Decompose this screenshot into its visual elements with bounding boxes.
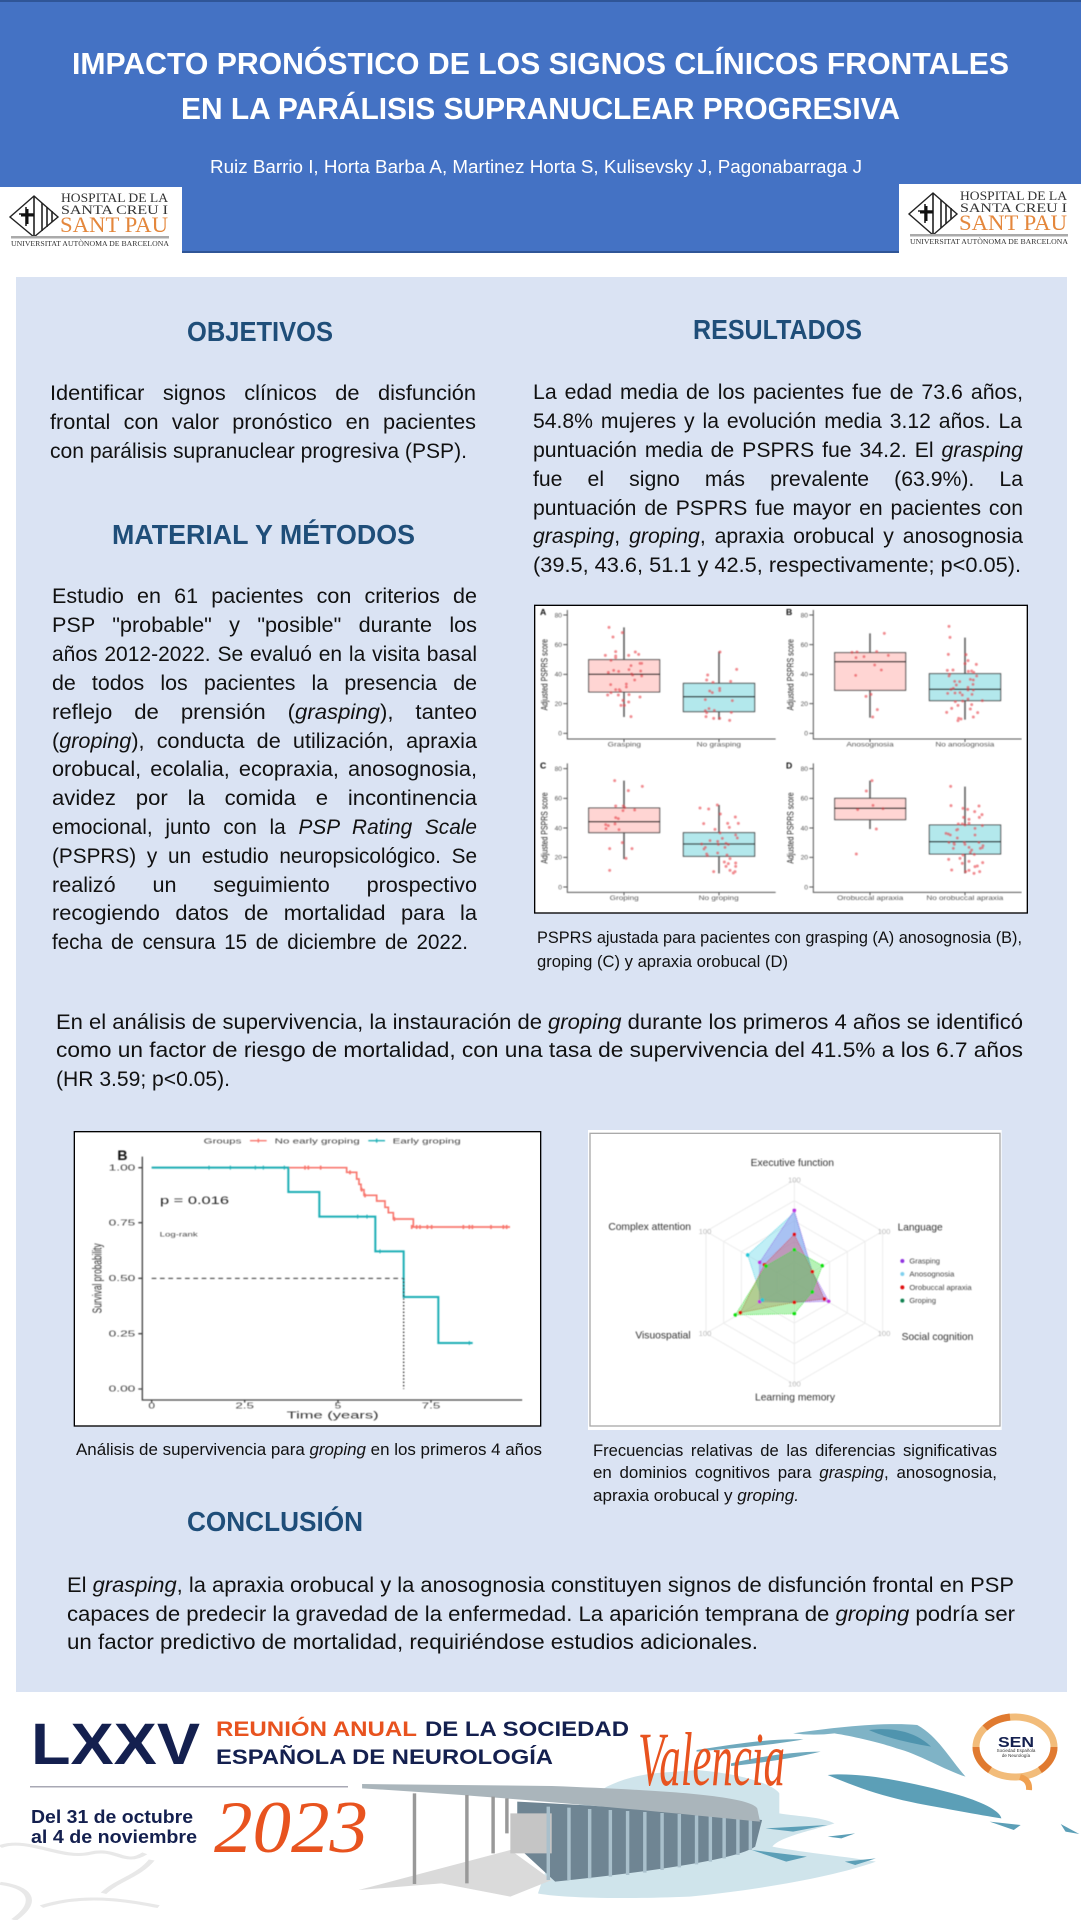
radar axis labels: Executive function [751,1158,834,1169]
heading: resultados: RESULTADOS [693,314,862,345]
text: material y métodos: fecha de censura 15 de diciembre de 2022. [52,931,468,954]
text: survival analysis: (HR 3.59; p<0.05). [56,1068,230,1091]
plot D: orobuccal apraxia: No orobuccal apraxia [926,895,1004,902]
chart axes: Survival probability [89,1243,104,1313]
text: resultados [533,381,1023,577]
title: IMPACTO PRONÓSTICO DE LOS SIGNOS CLÍNICOS FRONTALES [72,45,1009,81]
year: 2023 [214,1787,368,1869]
meeting name: DE LA SOCIEDAD [425,1718,629,1741]
chart legend: Groups [204,1136,242,1145]
plot A: grasping: 80 [555,612,562,619]
logo: Hospital de la Santa Creu i Sant Pau (right): SANTA CREU I [960,201,1067,215]
radar scale labels: 100 [788,1176,801,1185]
plot B: anosognosia [786,607,1022,749]
radar scale labels [699,1176,890,1389]
text: material y métodos: realizó un seguimiento prospectivo [52,874,477,897]
radar scale labels: 100 [878,1329,890,1338]
text: resultados: grasping, groping, apraxia orobucal y anosognosia [533,525,1023,548]
plot C: groping: C [540,761,547,771]
plot B: anosognosia: 80 [801,612,808,619]
text: conclusión [67,1574,1015,1654]
series: grasping [760,1210,829,1302]
radar chart [588,1130,1002,1430]
plot C: groping: 40 [555,825,562,832]
text: resultados: 54.8% mujeres y la evolución media 3.12 años. La [533,410,1022,433]
caption: radar chart: Frecuencias relativas de las diferencias significativas [593,1442,997,1460]
caption: radar chart [593,1442,997,1505]
plot D: orobuccal apraxia: D [786,761,792,771]
radar axis labels: Complex attention [608,1222,691,1233]
radar legend: Anosognosia [909,1269,955,1278]
radar scale labels: 100 [699,1329,711,1338]
text: material y métodos: Estudio en 61 pacientes con criterios de [52,585,477,608]
chart axes: Time (years) [287,1410,379,1421]
text: material y métodos: recogiendo datos de mortalidad para la [52,902,477,925]
authors: Ruiz Barrio I, Horta Barba A, Martinez Horta S, Kulisevsky J, Pagonabarraga J [210,156,862,177]
series: orobuccal apraxia [740,1234,824,1313]
logo: SEN: SEN [998,1734,1034,1751]
meeting name: REUNIÓN ANUAL [216,1717,417,1741]
logo: SEN: Sociedad Española [997,1748,1036,1753]
dates: Del 31 de octubre [31,1807,193,1827]
curve: no early groping [152,1166,510,1229]
chart axes: 0.75 [109,1217,136,1227]
chart axes: 7.5 [422,1401,441,1411]
logo: Hospital de la Santa Creu i Sant Pau (left): HOSPITAL DE LA [61,191,168,205]
text: objetivos: frontal con valor pronóstico en pacientes [50,411,476,434]
caption: box plots: PSPRS ajustada para pacientes con grasping (A) anosognosia (B), [537,929,1022,947]
text: material y métodos: (groping), conducta de utilización, apraxia [52,730,477,753]
logo: SEN: de Neurología [1002,1753,1031,1758]
plot B: anosognosia: 0 [804,731,808,738]
radar legend: Orobuccal apraxia [909,1283,973,1292]
radar axis labels: Language [898,1222,943,1233]
radar axis labels [608,1158,973,1404]
logo: Hospital de la Santa Creu i Sant Pau (right): HOSPITAL DE LA [960,189,1067,203]
logo: Hospital de la Santa Creu i Sant Pau (right): SANT PAU [959,210,1067,235]
radar scale labels: 100 [699,1227,711,1236]
survival chart [74,1132,541,1426]
plot D: orobuccal apraxia: Orobuccal apraxia [837,895,904,902]
meeting name: ESPAÑOLA DE NEUROLOGÍA [216,1746,553,1769]
meeting name [216,1717,629,1769]
chart axes: 1.00 [109,1162,136,1172]
decorative illustration: watercolor and building [0,1724,1079,1920]
radar axis labels: Social cognition [902,1332,973,1343]
plot A: grasping: No grasping [697,742,741,749]
text: objetivos [50,382,476,463]
curve: early groping [152,1168,473,1343]
plot C: groping: 80 [555,766,562,773]
chart legend [204,1136,461,1145]
radar scale labels: 100 [788,1380,801,1389]
text: survival analysis [56,1011,1023,1091]
chart axes [89,1147,522,1421]
plot A: grasping: 0 [558,731,562,738]
plot A: grasping: 40 [555,672,562,679]
caption: radar chart: en dominios cognitivos para grasping, anosognosia, [593,1464,997,1482]
text: resultados: (39.5, 43.6, 51.1 y 42.5, respectivamente; p<0.05). [533,554,1021,577]
heading: objetivos: OBJETIVOS [187,316,333,347]
caption: survival chart: Análisis de supervivencia para groping en los primeros 4 años [76,1441,542,1459]
text: conclusión: El grasping, la apraxia orobucal y la anosognosia constituyen signos de disfunción frontal en PSP [67,1574,1014,1597]
median survival marker [402,1278,406,1389]
text: material y métodos: de todos los pacientes la presencia de [52,672,477,695]
chart axes: 0.50 [109,1273,136,1283]
logo: Hospital de la Santa Creu i Sant Pau (right): UNIVERSITAT AUTÒNOMA DE BARCELONA [910,236,1069,246]
plot C: groping: Adjusted PSPRS score [540,792,550,864]
plot B: anosognosia: 60 [801,642,808,649]
logo: Hospital de la Santa Creu i Sant Pau (left): SANTA CREU I [61,203,168,217]
text: survival analysis: como un factor de riesgo de mortalidad, con una tasa de supervivencia del 41.5% a los 6.7 años [56,1039,1023,1062]
plot C: groping: 60 [555,796,562,803]
plot B: anosognosia: Adjusted PSPRS score [786,639,796,710]
text: material y métodos: emocional, junto con la PSP Rating Scale [52,816,477,839]
plot B: anosognosia: No anosognosia [935,742,995,749]
title [72,45,1009,126]
radar axis labels: Learning memory [755,1393,835,1404]
plot B: anosognosia: 40 [801,672,808,679]
series: groping [735,1250,822,1315]
heading: conclusión: CONCLUSIÓN [187,1506,363,1537]
text: conclusión: un factor predictivo de mortalidad, requiriéndose estudios adicionales. [67,1631,758,1654]
text: objetivos: con parálisis supranuclear progresiva (PSP). [50,440,467,463]
chart axes: 0 [148,1401,155,1411]
plot B: anosognosia: 20 [801,701,808,708]
chart axes: B [117,1147,127,1163]
text: material y métodos [52,585,477,954]
text: objetivos: Identificar signos clínicos de disfunción [50,382,476,405]
caption: box plots [537,929,1022,971]
text: material y métodos: (PSPRS) y un estudio neuropsicológico. Se [52,845,477,868]
chart axes: 0.00 [109,1384,136,1394]
chart legend: Early groping [393,1136,461,1145]
p value: p = 0.016 [160,1195,229,1207]
plot C: groping: 0 [558,884,562,891]
plot D: orobuccal apraxia: 20 [801,855,808,862]
p value: Log-rank [160,1232,198,1238]
plot D: orobuccal apraxia [786,761,1022,902]
chart axes: 2.5 [235,1401,254,1411]
plot D: orobuccal apraxia: Adjusted PSPRS score [786,792,796,864]
logo: SEN [976,1717,1054,1790]
plot D: orobuccal apraxia: 0 [804,884,808,891]
series: anosognosia [748,1213,824,1302]
plot C: groping [540,761,776,902]
series markers [760,1210,829,1302]
caption: box plots: groping (C) y apraxia orobucal (D) [537,953,788,971]
radar axis labels: Visuospatial [635,1331,691,1342]
heading: material y métodos: MATERIAL Y MÉTODOS [112,519,415,550]
dates [31,1807,197,1847]
radar scale labels: 100 [878,1227,890,1236]
plot C: groping: Groping [610,895,639,902]
plot A: grasping [540,607,776,749]
plot D: orobuccal apraxia: 60 [801,796,808,803]
radar legend: Grasping [909,1256,940,1265]
chart axes: 5 [335,1401,342,1411]
radar legend [900,1256,973,1305]
main panel [16,277,1067,1692]
text: material y métodos: reflejo de prensión ( grasping), tanteo [52,701,477,724]
text: conclusión: capaces de predecir la gravedad de la enfermedad. La aparición temprana de groping podría ser [67,1603,1015,1626]
plot D: orobuccal apraxia: 80 [801,766,808,773]
plot C: groping: No groping [699,895,739,902]
logo: Hospital de la Santa Creu i Sant Pau (left) [0,187,182,253]
logo: Hospital de la Santa Creu i Sant Pau (right) [899,184,1081,253]
plot A: grasping: 60 [555,642,562,649]
chart axes: 0.25 [109,1328,136,1338]
text: resultados: puntuación de PSPRS fue mayor en pacientes con [533,497,1023,520]
logo: Hospital de la Santa Creu i Sant Pau (left): UNIVERSITAT AUTÒNOMA DE BARCELONA [11,238,170,248]
p value [160,1195,229,1238]
caption: radar chart: apraxia orobucal y groping. [593,1487,799,1505]
box plots: adjusted PSPRS score [535,605,1027,913]
text: material y métodos: PSP "probable" y "posible" durante los [52,614,477,637]
chart legend: No early groping [275,1136,360,1145]
plot B: anosognosia: B [786,607,792,617]
plot B: anosognosia: Anosognosia [846,742,894,749]
text: survival analysis: En el análisis de supervivencia, la instauración de groping durante los primeros 4 años se identificó [56,1011,1023,1034]
plot A: grasping: Grasping [608,742,641,749]
text: material y métodos: avidez por la comida e incontinencia [52,787,477,810]
title: EN LA PARÁLISIS SUPRANUCLEAR PROGRESIVA [181,91,900,126]
plot C: groping: 20 [555,855,562,862]
plot A: grasping: 20 [555,701,562,708]
LXXV: LXXV [31,1712,200,1777]
plot D: orobuccal apraxia: 40 [801,825,808,832]
plot A: grasping: Adjusted PSPRS score [540,639,550,710]
logo: Hospital de la Santa Creu i Sant Pau (left): SANT PAU [60,212,168,237]
dates: al 4 de noviembre [31,1827,197,1847]
header banner [0,0,1081,253]
text: resultados: La edad media de los pacientes fue de 73.6 años, [533,381,1023,404]
plot A: grasping: A [540,607,547,617]
radar grid [706,1180,883,1384]
text: resultados: fue el signo más prevalente (63.9%). La [533,468,1023,491]
median reference lines [152,1277,404,1280]
city: Valencia [638,1718,785,1802]
footer banner: LXXV reunión anual [0,1712,1079,1920]
text: material y métodos: años 2012-2022. Se evaluó en la visita basal [52,643,477,666]
text: resultados: puntuación media de PSPRS fue 34.2. El grasping [533,439,1023,462]
radar legend: Groping [909,1296,936,1305]
text: material y métodos: orobucal, ecolalia, ecopraxia, anosognosia, [52,758,477,781]
